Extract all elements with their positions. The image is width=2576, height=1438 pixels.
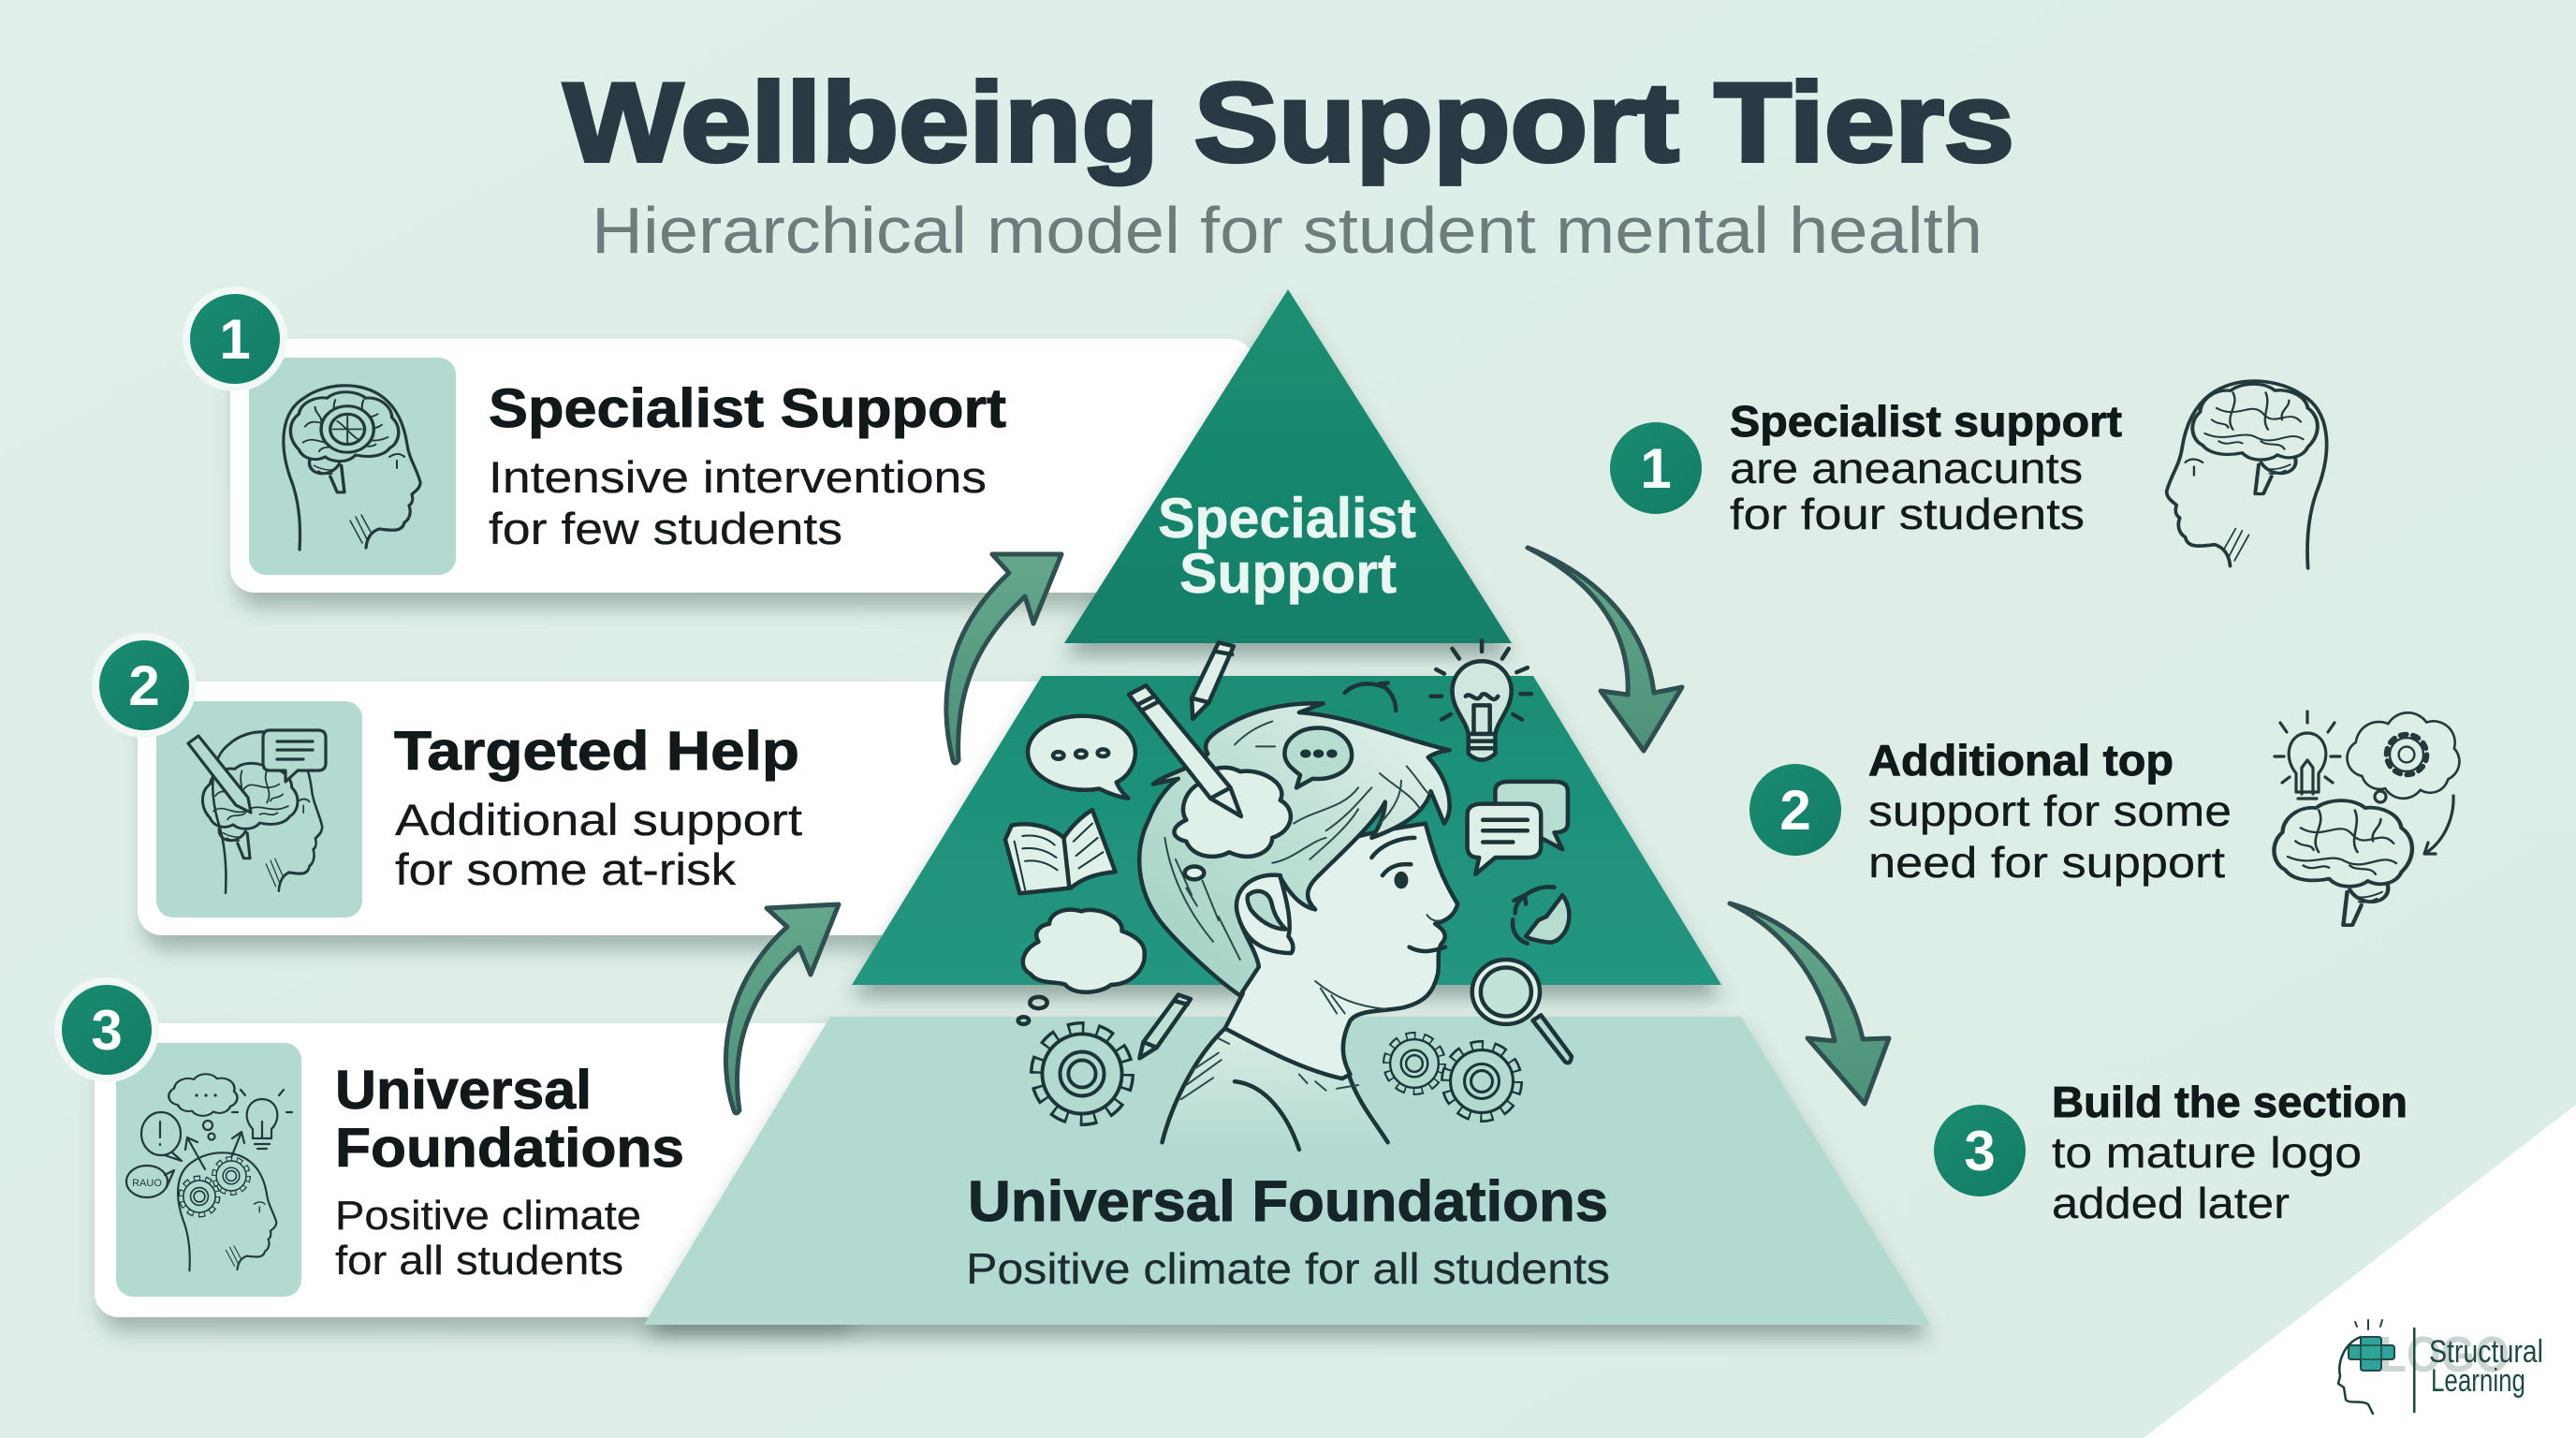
heading: Foundations [335,1118,684,1179]
text block [2052,1078,2408,1227]
number badge 3 [54,977,159,1082]
sweater and neck [1163,1029,1388,1153]
right item 1 [1610,381,2327,568]
logo divider [2413,1328,2415,1413]
badge 2: 2 [1779,779,1811,842]
tier: specialist apex [1064,289,1512,643]
badge 1 [1610,422,1702,514]
arrow: base to middle left [725,904,839,1113]
face and neck [1225,824,1457,1078]
ear [1237,875,1293,953]
big pencil [1129,685,1241,816]
magnifier [1472,960,1572,1063]
heading: Specialist Support [489,378,1006,439]
small arc marks [1345,683,1396,711]
gears [1038,1030,1516,1118]
title: Wellbeing Support Tiers [564,60,2014,185]
text block: need for support [1868,838,2225,887]
pyramid [644,289,1930,1325]
tier: targeted help middle [852,676,1721,985]
panel: left card 3 universal foundations [54,977,853,1317]
hair [1139,703,1450,995]
logo [2338,1320,2543,1414]
thought cloud on head [1174,768,1291,879]
illustration: student with ideas [1005,640,1572,1153]
panel: left card 1 specialist support [183,286,1254,593]
open book [1005,810,1116,893]
logo mark: head with cross [2338,1320,2394,1414]
facial features [1315,838,1445,1013]
text block: added later [2052,1179,2290,1227]
hair strands [1164,722,1431,960]
right item 3 [1934,1078,2408,1227]
description: Positive climate [335,1193,641,1239]
number badge 1: 1 [219,308,251,371]
description: for all students [335,1238,623,1284]
logo wordmark: Structural [2429,1334,2543,1370]
description [395,795,802,894]
refresh mark [1513,887,1569,944]
description: for few students [489,504,842,553]
logo wordmark: Learning [2431,1363,2525,1399]
base heading: Universal Foundations [968,1169,1608,1233]
icon: head with brain [2167,381,2327,568]
text block: support for some [1868,786,2232,835]
tier: universal foundations base [644,1017,1930,1325]
heading: Universal [335,1060,592,1121]
heading [335,1060,684,1179]
arrow: middle to apex left [946,554,1061,763]
panel: left card 2 targeted help [92,633,1111,935]
text block: Specialist support [1730,397,2122,446]
logo wordmark [2429,1334,2543,1399]
small pencil lower [1139,995,1191,1058]
subtitle: Hierarchical model for student mental health [592,194,1983,267]
text block: Build the section [2052,1078,2408,1126]
description [489,452,987,553]
text block: to mature logo [2052,1128,2362,1177]
apex label [1158,487,1416,605]
arrow: apex to middle right [1528,548,1682,751]
apex label: Support [1179,542,1397,605]
double chat bubbles [1468,782,1568,874]
text block [1730,397,2122,538]
icon tile: head with pencil and speech bubble [156,701,362,917]
heading: Targeted Help [394,721,799,782]
speech bubble left [1028,716,1135,799]
badge 2 [1749,764,1841,856]
number badge 2: 2 [128,654,160,717]
description: Intensive interventions [489,452,987,502]
icon tile: head with gears and ideas [116,1043,301,1297]
badge 3 [1934,1105,2026,1196]
text block: for four students [1730,490,2085,538]
text block: Additional top [1868,736,2174,785]
description: for some at-risk [395,844,737,894]
number badge 1 [183,286,287,391]
apex label: Specialist [1158,487,1416,550]
lightbulb [1431,640,1531,760]
arrow: middle to base right [1730,903,1889,1104]
text block: are aneanacunts [1730,444,2083,492]
icon tile: head with brain [249,358,456,575]
small pencil top [1192,642,1234,719]
thought dots [1018,997,1047,1024]
text block [1868,736,2232,887]
speech bubble on hair [1284,727,1352,787]
cloud left [1023,910,1145,992]
icon: bulb, thought cloud and brain [2274,712,2459,925]
badge 3: 3 [1964,1120,1996,1182]
description: Additional support [395,795,802,844]
number badge 2 [92,633,197,738]
base description: Positive climate for all students [966,1244,1610,1293]
icon tile: head with gears and ideas: RAUO [132,1178,162,1189]
description [335,1193,641,1284]
right item 2 [1749,712,2459,925]
badge 1: 1 [1640,437,1672,500]
number badge 3: 3 [91,999,123,1062]
white logo corner [2144,1105,2576,1438]
ghost logo word: LOGO [2379,1327,2510,1383]
